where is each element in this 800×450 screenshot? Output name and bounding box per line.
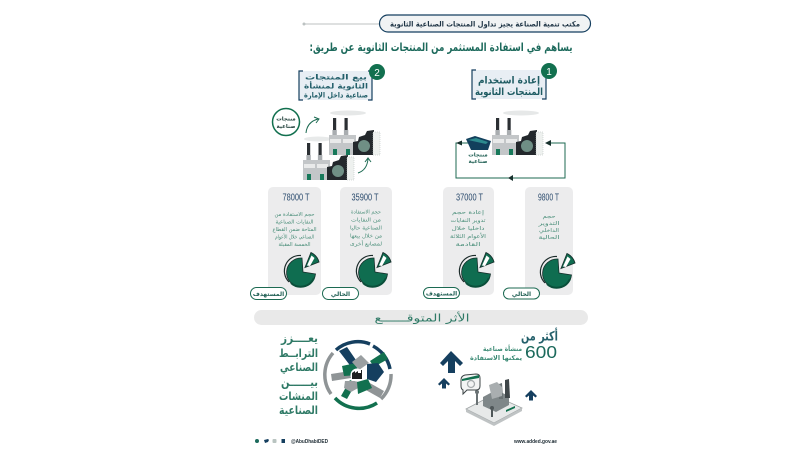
diagram: sale to another facility: منتجات [276,116,296,122]
diagram: reuse loop with factory [456,110,565,181]
text block: strengthen industrial linkage: المنشات [279,389,318,403]
card: 35900 T current: الصناعية حاليا [350,226,382,232]
panel: method 1 heading: المنتجات الثانوية [475,87,543,98]
panel: method 2 heading: بيع المنتجات [305,72,367,82]
expected impact band: الأثر المتوقــــــع [374,312,470,324]
card: 35900 T current: لمصانع أخرى [350,240,382,248]
footer: website: www.added.gov.ae [513,439,557,445]
footer: social icons and handle [255,439,328,445]
title pill with connector: مكتب تنمية الصناعة يجيز تداول المنتجات الصناعية الثانوية [390,20,580,28]
text block: strengthen industrial linkage: الصناعي [280,360,318,374]
text block: more than 600 facilities: 600 [525,342,557,362]
card: 9800 T current: الحالي [512,291,531,298]
card: 37000 T target: داخليا خلال [452,226,485,232]
diagram: reuse loop with factory: منتجات [468,152,488,158]
card: 9800 T current: الحالية [538,235,560,241]
card: 37000 T target: 37000 T [456,192,483,204]
card: 35900 T current: من خلال بيعها [350,234,382,240]
text block: strengthen industrial linkage: يعــــزز [280,331,318,345]
card: 37000 T target: تدوير النفايات [450,218,486,224]
text block: strengthen industrial linkage [279,331,318,417]
diagram: sale to another facility [272,108,380,180]
card: 37000 T target: المستهدف [426,290,457,298]
diagram: sale to another facility: صناعية [277,124,295,130]
text block: more than 600 facilities: أكثر من [521,328,558,344]
panel: method 2 heading [299,64,385,100]
card: 78000 T target: المستهدف [253,291,284,298]
text block: strengthen industrial linkage: الترابــط [279,346,318,360]
card: 35900 T current [322,187,392,300]
panel: method 1 heading: إعادة استخدام [478,76,540,86]
card: 37000 T target: القادمة [456,242,480,248]
card: 9800 T current: التدوير [537,221,560,227]
card: 37000 T target: الأعوام الثلاثة [450,232,486,240]
icon: small up arrow right [525,390,537,400]
panel: method 2 heading: الثانوية لمنشأة [304,80,368,90]
text block: more than 600 facilities: يمكنها الاستفادة [470,354,522,362]
card: 78000 T target: الصناعي خلال الأعوام [275,232,314,240]
text block: strengthen industrial linkage: الصناعية [279,403,318,417]
card: 9800 T current [504,187,575,299]
panel: method 2 heading: صناعية داخل الإمارة [304,90,368,100]
text block: more than 600 facilities [470,328,558,362]
subheading: يساهم في استفادة المستثمر من المنتجات الثانوية عن طريق: [310,40,572,55]
card: 37000 T target: إعادة حجم [452,210,485,216]
expected impact band [254,310,588,325]
text block: strengthen industrial linkage: بيــــــن [281,375,318,389]
card: 9800 T current: حجم [542,214,556,220]
panel: method 1 heading [472,63,557,99]
diagram: reuse loop with factory: صناعية [469,159,487,165]
card: 78000 T target: الخمسة المقبلة [278,242,310,248]
card: 78000 T target: 78000 T [282,192,310,204]
footer: social icons and handle: @AbuDhabiDED [291,439,328,445]
card: 78000 T target [250,187,321,300]
card: 35900 T current: 35900 T [352,192,378,204]
icon: linked hands wheel [325,342,391,408]
panel: method 2 heading: 2 [374,68,380,79]
card: 9800 T current: الداخلي [539,228,559,234]
card: 37000 T target [424,187,494,298]
card: 35900 T current: الحالي [331,291,350,298]
icon: isometric factory [461,374,522,426]
title pill with connector [302,15,590,32]
panel: method 1 heading: 1 [546,67,552,78]
text block: more than 600 facilities: منشأة صناعية [483,344,522,353]
card: 35900 T current: حجم الاستفادة [351,210,381,216]
icon: large up arrow [440,351,463,373]
card: 35900 T current: من النفايات [351,218,381,224]
card: 78000 T target: النفايات الصناعية [276,220,314,226]
card: 78000 T target: المتاحة ضمن القطاع [272,227,316,233]
card: 78000 T target: حجم الاستفادة من [274,212,314,218]
card: 9800 T current: 9800 T [538,192,559,204]
icon: small up arrow left [438,378,450,388]
